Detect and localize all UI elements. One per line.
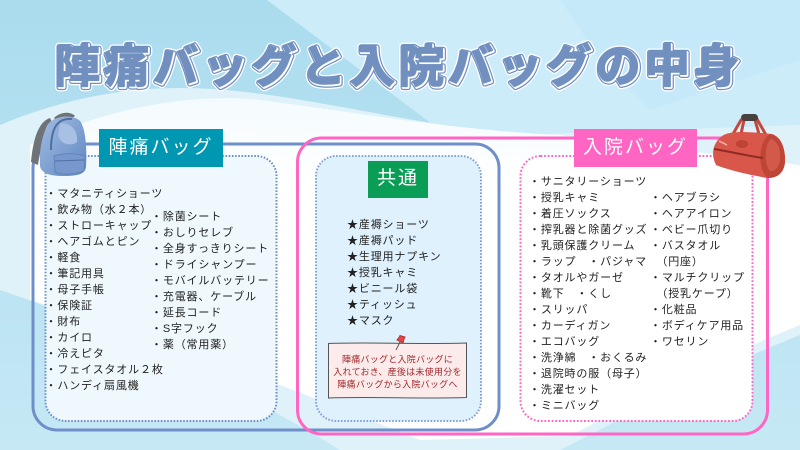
panel: hospital bag frame <box>298 138 768 434</box>
callout: note: 陣痛バッグから入院バッグへ <box>337 378 458 390</box>
panel: labour bag list background <box>46 156 276 421</box>
heading: labour bag: 陣痛バッグ <box>108 137 214 158</box>
text block: hospital bag list, column 2: ・ヘアブラシ ・ヘアアイロン ・ベビー爪切り ・バスタオル （円座） ・マルチクリップ （授乳ケープ） ・化粧品 ・ボディケア用品 ・ワセリン <box>650 192 745 348</box>
title: 陣痛バッグと入院バッグの中身 <box>56 42 740 93</box>
icon: push pin <box>396 336 405 350</box>
title: 陣痛バッグと入院バッグの中身 <box>55 41 739 92</box>
text block: labour bag list, column 1: ・マタニティショーツ ・飲み物（水２本） ・ストローキャップ ・ヘアゴムとピン ・軽食 ・筆記用具 ・母子手帳 ・保険証 ・財布 ・カイロ ・冷えピタ ・フェイスタオル２枚 ・ハンディ扇風機 <box>46 188 164 392</box>
title: 陣痛バッグと入院バッグの中身 <box>56 42 740 93</box>
text block: hospital bag list, column 1: ・サニタリーショーツ ・授乳キャミ ・着圧ソックス ・搾乳器と除菌グッズ ・乳頭保護クリーム ・ラップ ・パジャマ ・タオルやガーゼ ・靴下 ・くし ・スリッパ ・カーディガン ・エコバッグ ・洗浄綿 ・おくるみ ・退院時の服（母子） ・洗濯セット ・ミニバッグ <box>529 176 648 412</box>
text block: common list: ★産褥ショーツ ★産褥パッド ★生理用ナプキン ★授乳キャミ ★ビニール袋 ★ティッシュ ★マスク <box>347 219 441 327</box>
callout: note: 陣痛バッグと入院バッグに <box>342 354 453 364</box>
panel: hospital bag list background <box>520 156 752 421</box>
panel: common list background <box>316 156 481 421</box>
heading: common: 共通 <box>377 168 419 189</box>
heading background: common <box>368 161 428 198</box>
title: 陣痛バッグと入院バッグの中身 <box>56 42 740 93</box>
panel: labour bag frame <box>33 144 499 430</box>
heading: hospital bag: 入院バッグ <box>583 137 688 158</box>
heading background: labour bag <box>99 129 223 167</box>
callout: note: 入れておき、産後は未使用分を <box>333 366 462 377</box>
heading background: hospital bag <box>574 129 697 167</box>
text block: labour bag list, column 2: ・除菌シート ・おしりセレブ ・全身すっきりシート ・ドライシャンプー ・モバイルバッテリー ・充電器、ケーブル ・延長コード ・S字フック ・薬（常用薬） <box>151 211 270 351</box>
